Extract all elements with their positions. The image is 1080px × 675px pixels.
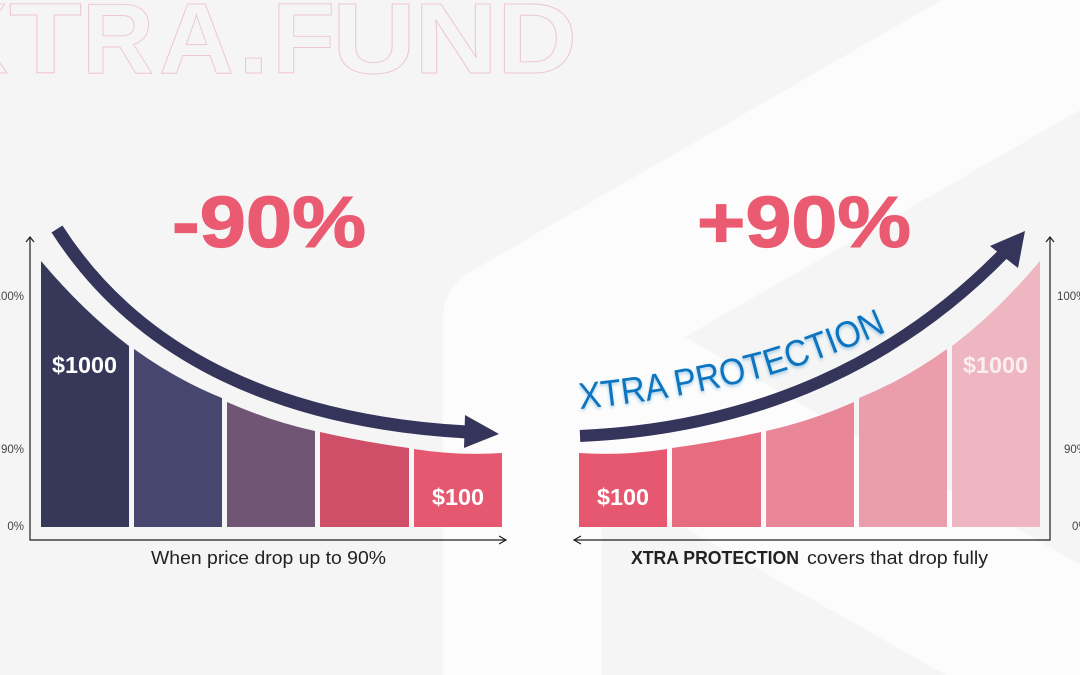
axes: [574, 237, 1054, 544]
value label 100: $100: [597, 484, 649, 510]
axis tick labels: [0, 291, 24, 533]
caption: covers that drop fully: [807, 548, 988, 568]
value label 100: $100: [432, 484, 484, 510]
downward arrow: [57, 229, 499, 448]
heading: plus 90 percent: +90%: [697, 183, 911, 263]
panel: protection chart: [572, 231, 1080, 568]
value label 1000: $1000: [963, 352, 1028, 378]
heading: minus 90 percent: -90%: [172, 183, 366, 263]
caption: XTRA PROTECTION: [631, 548, 799, 568]
bars: rising cover: [579, 261, 1040, 527]
axis tick labels: [1057, 291, 1080, 533]
panel: price drop chart: [0, 229, 506, 568]
caption: When price drop up to 90%: [151, 548, 386, 568]
bars: declining value: [41, 261, 502, 527]
axes: [26, 237, 506, 544]
axis tick labels: 90%: [1, 444, 24, 456]
background K logo shape: [443, 0, 1080, 675]
curved protection label: XTRA PROTECTION: [578, 309, 886, 412]
watermark title: [0, 0, 577, 95]
axis tick labels: 0%: [7, 521, 24, 533]
upward arrow: [580, 231, 1025, 436]
value label 1000: $1000: [52, 352, 117, 378]
